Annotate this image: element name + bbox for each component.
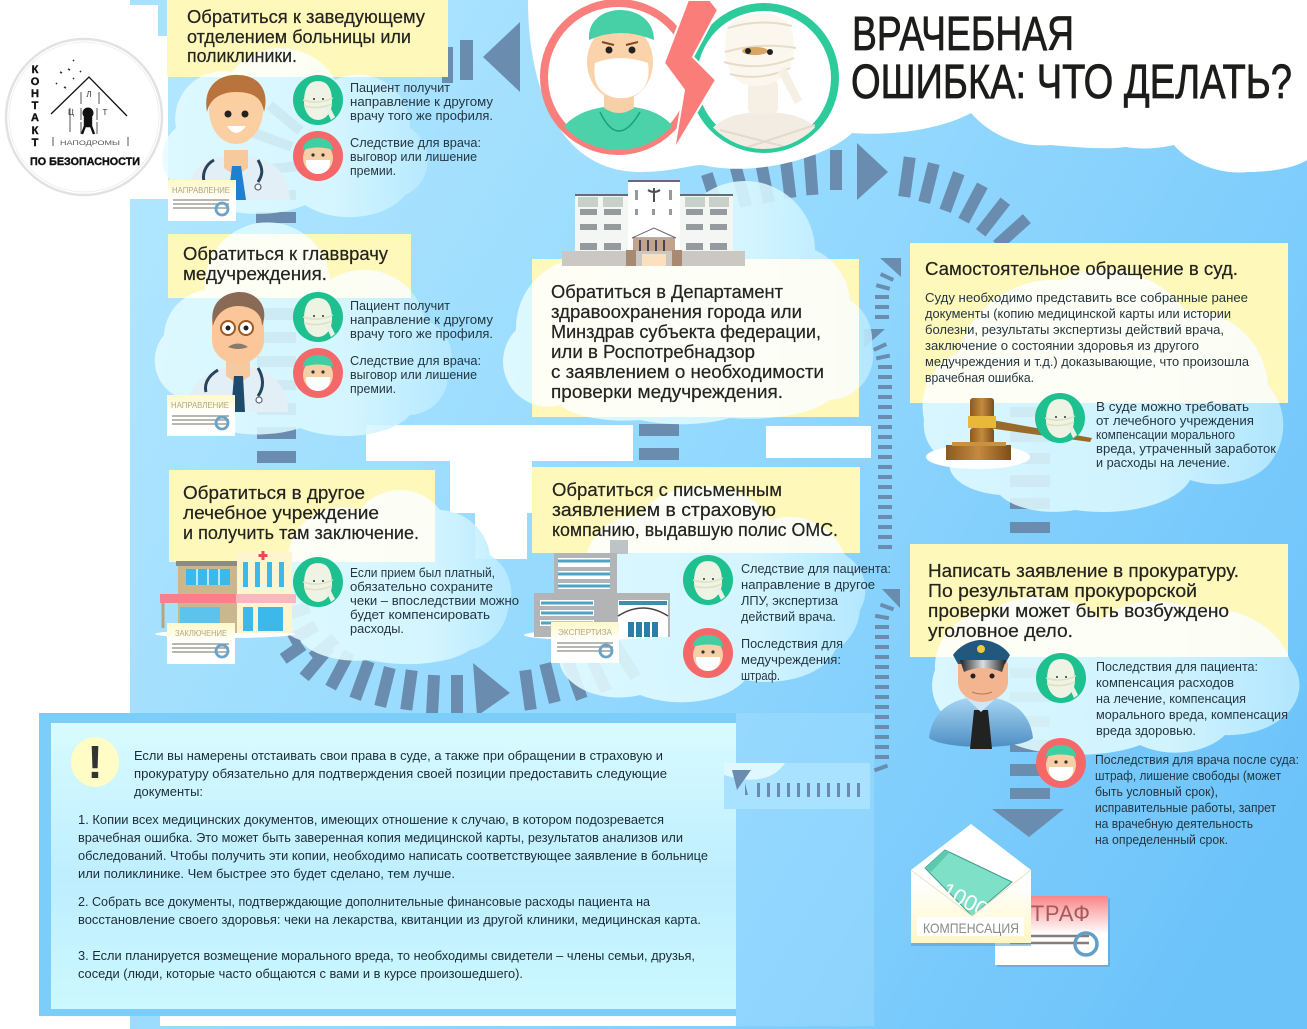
icon: doctor	[293, 131, 343, 181]
logo: vertical word: Т	[32, 137, 39, 149]
text: court claims	[1096, 400, 1277, 470]
text: patient outcome: направление к другому	[350, 313, 494, 327]
logo: vertical word: Н	[31, 88, 39, 100]
text: doctor outcome	[350, 136, 481, 178]
white patches	[366, 425, 871, 559]
text: receipts note: Если прием был платный,	[350, 566, 495, 580]
text: court claims: компенсации морального	[1096, 428, 1235, 442]
panel: warning documents	[39, 713, 736, 1026]
panel: department head	[168, 7, 494, 221]
logo: house: Ц	[68, 108, 74, 117]
card: conclusion	[167, 623, 235, 664]
text: doctor outcome: премии.	[350, 382, 396, 396]
arrow: bottom return strip	[724, 763, 870, 809]
heading: отделением больницы или	[187, 27, 411, 47]
title: ВРАЧЕБНАЯ	[852, 8, 1074, 61]
text: item 1: 1. Копии всех медицинских документов, имеющих отношение к случаю, в котором подозревается	[78, 813, 664, 827]
text: court claims: от лечебного учреждения	[1096, 414, 1254, 428]
icon: hospital building	[562, 180, 745, 266]
logo: house	[51, 60, 128, 147]
text: court documents: заключение о состоянии здоровья из другого	[925, 339, 1199, 353]
text: receipts note: обязательно сохраните	[350, 580, 493, 594]
text: patient outcome	[1096, 660, 1288, 738]
icon: doctor portrait	[544, 3, 692, 151]
text: patient outcome	[350, 81, 494, 123]
icon: patient	[1036, 653, 1086, 703]
text: court claims: вреда, утраченный заработок	[1096, 442, 1277, 456]
panel: chief physician	[167, 244, 494, 436]
text: item 3: 3. Если планируется возмещение морального вреда, то необходимы свидетели – члены семьи, друзья,	[78, 949, 695, 963]
text: patient outcome: направление к другому	[350, 95, 494, 109]
heading: Самостоятельное обращение в суд.	[925, 259, 1238, 279]
icon: doctor	[293, 348, 343, 398]
text: introduction: прокуратуру обязательно для подтверждения своей позиции предоставить следующие	[134, 767, 667, 781]
text: doctor outcome: выговор или лишение	[350, 150, 477, 164]
text: doctor outcome: Следствие для врача:	[350, 354, 481, 368]
text: court documents: болезни, результаты экспертизы действий врача,	[925, 323, 1224, 337]
heading: Обратиться в Департамент	[551, 282, 783, 302]
icon: chief physician figure	[186, 292, 288, 412]
text: doctor outcome: премии.	[350, 164, 396, 178]
heading	[183, 244, 388, 284]
arrow: central column ticks	[639, 424, 679, 460]
text: patient outcome	[741, 562, 891, 624]
text: court documents: медучреждения и т.д.) доказывающие, что произошла	[925, 355, 1249, 369]
heading	[183, 483, 419, 543]
heading: заявлением в страховую	[552, 500, 776, 520]
icon: banknotes: 1000	[938, 877, 993, 922]
card: fine	[995, 896, 1110, 967]
card: referral: НАПРАВЛЕНИЕ	[172, 185, 230, 195]
icon: doctor figure	[186, 75, 290, 200]
icon: bandaged patient portrait	[693, 7, 835, 150]
panel: other clinic	[155, 483, 519, 664]
text: item 3	[78, 949, 695, 981]
card: fine: ШТРАФ	[1010, 901, 1090, 926]
text: item 1: врачебная ошибка. Это может быть заверенная копия медицинской карты, результатов анализов или	[78, 831, 683, 845]
title cloud	[528, 0, 1307, 173]
arrow: bottom arc	[279, 601, 641, 716]
arrow: right vertical column	[864, 258, 901, 772]
text: patient outcome	[350, 299, 494, 341]
text: doctor outcome: на определенный срок.	[1095, 833, 1228, 847]
text: patient outcome: действий врача.	[741, 610, 836, 624]
text: institution outcome: медучреждения:	[741, 653, 841, 667]
icon: lightning	[664, 0, 718, 150]
arrow: prosecutor column ticks	[992, 668, 1064, 837]
icon: patient	[293, 75, 343, 125]
text: patient outcome: Последствия для пациента:	[1096, 660, 1258, 674]
heading: лечебное учреждение	[183, 503, 379, 523]
icon: compensation envelope: КОМПЕНСАЦИЯ	[923, 920, 1019, 936]
card: referral: НАПРАВЛЕНИЕ	[171, 400, 229, 410]
heading: здравоохранения города или	[551, 302, 802, 322]
text: court claims: и расходы на лечение.	[1096, 456, 1230, 470]
text: court documents: Суду необходимо представить все собранные ранее	[925, 291, 1248, 305]
text: doctor outcome: быть условный срок),	[1095, 785, 1218, 799]
text: patient outcome: направление в другое	[741, 578, 875, 592]
heading: Обратиться к заведующему	[187, 7, 425, 27]
text: institution outcome: штраф.	[741, 669, 780, 683]
card: referral	[167, 395, 235, 436]
text: introduction: документы:	[134, 785, 203, 799]
heading: Обратиться к главврачу	[183, 244, 388, 264]
logo: house: Т	[103, 108, 108, 117]
card: referral	[168, 180, 236, 221]
icon: doctor	[683, 628, 733, 678]
logo: vertical word	[31, 64, 40, 149]
arrow: court column ticks	[1010, 407, 1050, 533]
heading: Написать заявление в прокуратуру.	[928, 561, 1239, 581]
text: court documents: врачебная ошибка.	[925, 371, 1034, 385]
heading: компанию, выдавшую полис ОМС.	[552, 520, 838, 540]
text: patient outcome: врачу того же профиля.	[350, 327, 493, 341]
heading: Обратиться с письменным	[552, 480, 782, 500]
text: court claims: В суде можно требовать	[1096, 400, 1249, 414]
heading: проверки медучреждения.	[551, 382, 783, 402]
card: conclusion: ЗАКЛЮЧЕНИЕ	[175, 628, 227, 638]
text: patient outcome: ЛПУ, экспертиза	[741, 594, 838, 608]
text: item 1	[78, 813, 708, 881]
heading: медучреждения.	[183, 264, 327, 284]
logo: ПО БЕЗОПАСНОСТИ	[30, 156, 140, 168]
icon: police officer	[929, 640, 1033, 749]
icon: clinic building	[155, 551, 296, 638]
icon: insurance building	[524, 540, 670, 640]
text: item 2: восстановление своего здоровья: чеки на лекарства, квитанции из другой клиники, медицинская карта.	[78, 913, 701, 927]
heading	[928, 561, 1239, 641]
text: doctor outcome: выговор или лишение	[350, 368, 477, 382]
title	[851, 8, 1292, 109]
heading: с заявлением о необходимости	[551, 362, 824, 382]
icon: patient	[683, 555, 733, 605]
text: patient outcome: морального вреда, компенсация	[1096, 708, 1288, 722]
logo: vertical word: О	[31, 76, 40, 88]
text: item 1: обследований. Чтобы получить эти копии, необходимо написать соответствующее заявление в больнице	[78, 849, 708, 863]
heading: поликлиники.	[187, 46, 297, 66]
icon: compensation envelope	[911, 824, 1031, 946]
text: doctor outcome: Последствия для врача после суда:	[1095, 753, 1299, 767]
text: introduction	[134, 749, 667, 799]
heading	[187, 7, 425, 66]
panel fills: yellow heading boxes	[167, 0, 1288, 657]
arrow: left column ticks	[252, 101, 304, 463]
text: doctor outcome	[1095, 753, 1299, 847]
heading: или в Роспотребнадзор	[551, 342, 755, 362]
heading: уголовное дело.	[928, 621, 1073, 641]
text: receipts note: чеки – впоследствии можно	[350, 594, 519, 608]
icon: exclamation mark	[71, 736, 119, 788]
text: item 3: соседи (люди, которые часто общаются с вами и в курсе произошедшего).	[78, 967, 523, 981]
text: court documents: документы (копию медицинской карты или истории	[925, 307, 1231, 321]
text: doctor outcome: штраф, лишение свободы (может	[1095, 769, 1281, 783]
text: institution outcome: Последствия для	[741, 637, 843, 651]
logo	[6, 39, 162, 195]
text: patient outcome: Следствие для пациента:	[741, 562, 891, 576]
text: receipts note: расходы.	[350, 622, 404, 636]
text: doctor outcome: Следствие для врача:	[350, 136, 481, 150]
text: receipts note: будет компенсировать	[350, 608, 490, 622]
text: item 2: 2. Собрать все документы, подтверждающие дополнительные финансовые расходы пациента на	[78, 895, 650, 909]
panel: health department	[551, 180, 824, 402]
heading: проверки может быть возбуждено	[928, 601, 1229, 621]
icon: patient	[293, 557, 343, 607]
heading: По результатам прокурорской	[928, 581, 1197, 601]
text: patient outcome: Пациент получит	[350, 81, 450, 95]
logo: vertical word: К	[32, 125, 39, 137]
panel: insurance company	[524, 480, 891, 683]
text: patient outcome: на лечение, компенсация	[1096, 692, 1246, 706]
heading	[552, 480, 838, 540]
icon: exclamation mark: !	[87, 736, 103, 788]
heading: Минздрав субъекта федерации,	[551, 322, 821, 342]
text: item 1: или поликлинике. Чем быстрее это будет сделано, тем лучше.	[78, 867, 455, 881]
text: institution outcome	[741, 637, 843, 683]
clouds behind content	[155, 48, 1299, 755]
icon: gavel	[926, 398, 1092, 469]
panel: prosecutor	[928, 561, 1299, 847]
icon: patient	[1035, 393, 1085, 443]
logo: house: Л	[86, 90, 92, 99]
heading: Обратиться в другое	[183, 483, 365, 503]
dashed route arrows	[252, 22, 1064, 837]
logo: vertical word: А	[31, 112, 39, 124]
text: item 2	[78, 895, 701, 927]
panel: court	[925, 259, 1277, 470]
heading	[551, 282, 824, 402]
text: receipts note	[350, 566, 519, 636]
text: patient outcome: компенсация расходов	[1096, 676, 1234, 690]
icon: doctor	[1036, 738, 1086, 788]
card: examination: ЭКСПЕРТИЗА	[558, 627, 612, 637]
text: doctor outcome	[350, 354, 481, 396]
logo: house: НАПОДРОМЫ	[60, 140, 120, 147]
text: patient outcome: врачу того же профиля.	[350, 109, 493, 123]
logo: vertical word: Т	[32, 100, 39, 112]
card: examination	[551, 622, 619, 663]
text: patient outcome: Пациент получит	[350, 299, 450, 313]
text: court documents	[925, 291, 1249, 385]
text: introduction: Если вы намерены отстаивать свои права в суде, а также при обращении в страховую и	[134, 749, 663, 763]
text: doctor outcome: на врачебную деятельность	[1095, 817, 1253, 831]
icon: patient	[293, 292, 343, 342]
arrow: top arc to court	[701, 143, 1031, 250]
logo: vertical word: К	[32, 64, 39, 76]
heading: и получить там заключение.	[183, 523, 419, 543]
arrow: top-left triangle	[442, 22, 520, 92]
text: patient outcome: вреда здоровью.	[1096, 724, 1196, 738]
text: doctor outcome: исправительные работы, запрет	[1095, 801, 1276, 815]
